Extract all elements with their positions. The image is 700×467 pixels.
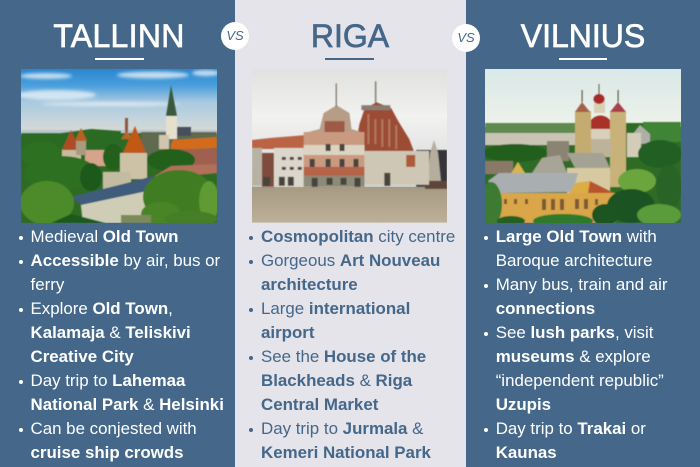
bullet 1: [496, 227, 657, 270]
bullet 5: [30, 419, 197, 462]
panel: Tallinn: [0, 0, 235, 467]
bullet 2: [261, 251, 440, 294]
bullet 2: architecture: [261, 275, 358, 294]
heading underline: [95, 58, 144, 60]
panel: Riga: [235, 0, 466, 467]
bullet 2: Accessible by air, bus or: [30, 251, 220, 270]
bullet 2: [30, 251, 220, 294]
panel: Vilnius: [466, 0, 700, 467]
photo: Vilnius churches: [485, 69, 681, 223]
photo: House of the Blackheads: [252, 70, 447, 223]
bullet 5: Can be conjested with: [30, 419, 197, 438]
bullet 4: Blackheads & Riga: [261, 371, 412, 390]
bullet 3: Uzupis: [496, 395, 551, 414]
bullet 3: Creative City: [30, 347, 134, 366]
bullet 5: [261, 419, 431, 462]
heading: Riga: RIGA: [311, 18, 389, 54]
bullet list: Vilnius: [484, 227, 668, 462]
bullet list: Riga: [249, 227, 455, 462]
bullet 4: See the House of the: [261, 347, 426, 366]
bullet 1: Medieval Old Town: [30, 227, 178, 246]
bullet 4: [496, 419, 646, 462]
bullet list: Tallinn: [19, 227, 224, 462]
bullet 4: Day trip to Trakai or: [496, 419, 646, 438]
bullet 3: airport: [261, 323, 314, 342]
bullet 3: [261, 299, 410, 342]
bullet 4: Central Market: [261, 395, 378, 414]
bullet 3: [496, 323, 664, 414]
vs badge right: VS: [457, 30, 475, 45]
bullet 1: Cosmopolitan city centre: [261, 227, 455, 246]
bullet 2: ferry: [30, 275, 64, 294]
bullet 3: “independent republic”: [496, 371, 664, 390]
bullet 3: museums & explore: [496, 347, 651, 366]
heading: Tallinn: TALLINN: [53, 18, 185, 54]
bullet 2: connections: [496, 299, 595, 318]
vs badge right: [452, 24, 480, 52]
bullet 1: Large Old Town with: [496, 227, 657, 246]
bullet 3: Kalamaja & Teliskivi: [30, 323, 191, 342]
heading underline: [559, 58, 607, 60]
heading: Vilnius: VILNIUS: [521, 18, 645, 54]
bullet 4: Day trip to Lahemaa: [30, 371, 185, 390]
bullet 2: [496, 275, 668, 318]
bullet 4: Kaunas: [496, 443, 557, 462]
bullet 4: [261, 347, 426, 414]
bullet 3: Explore Old Town,: [30, 299, 173, 318]
bullet 2: Gorgeous Art Nouveau: [261, 251, 440, 270]
vs badge left: [221, 22, 249, 50]
vs badge left: VS: [226, 28, 244, 43]
bullet 4: [30, 371, 224, 414]
bullet 5: Day trip to Jurmala &: [261, 419, 423, 438]
bullet 3: See lush parks, visit: [496, 323, 653, 342]
bullet 2: Many bus, train and air: [496, 275, 668, 294]
bullet 5: cruise ship crowds: [30, 443, 184, 462]
bullet 5: Kemeri National Park: [261, 443, 431, 462]
bullet 3: [30, 299, 191, 366]
bullet 4: National Park & Helsinki: [30, 395, 224, 414]
heading underline: [325, 58, 374, 60]
photo: Tallinn skyline: [21, 69, 217, 223]
bullet 1: Baroque architecture: [496, 251, 652, 270]
bullet 3: Large international: [261, 299, 410, 318]
